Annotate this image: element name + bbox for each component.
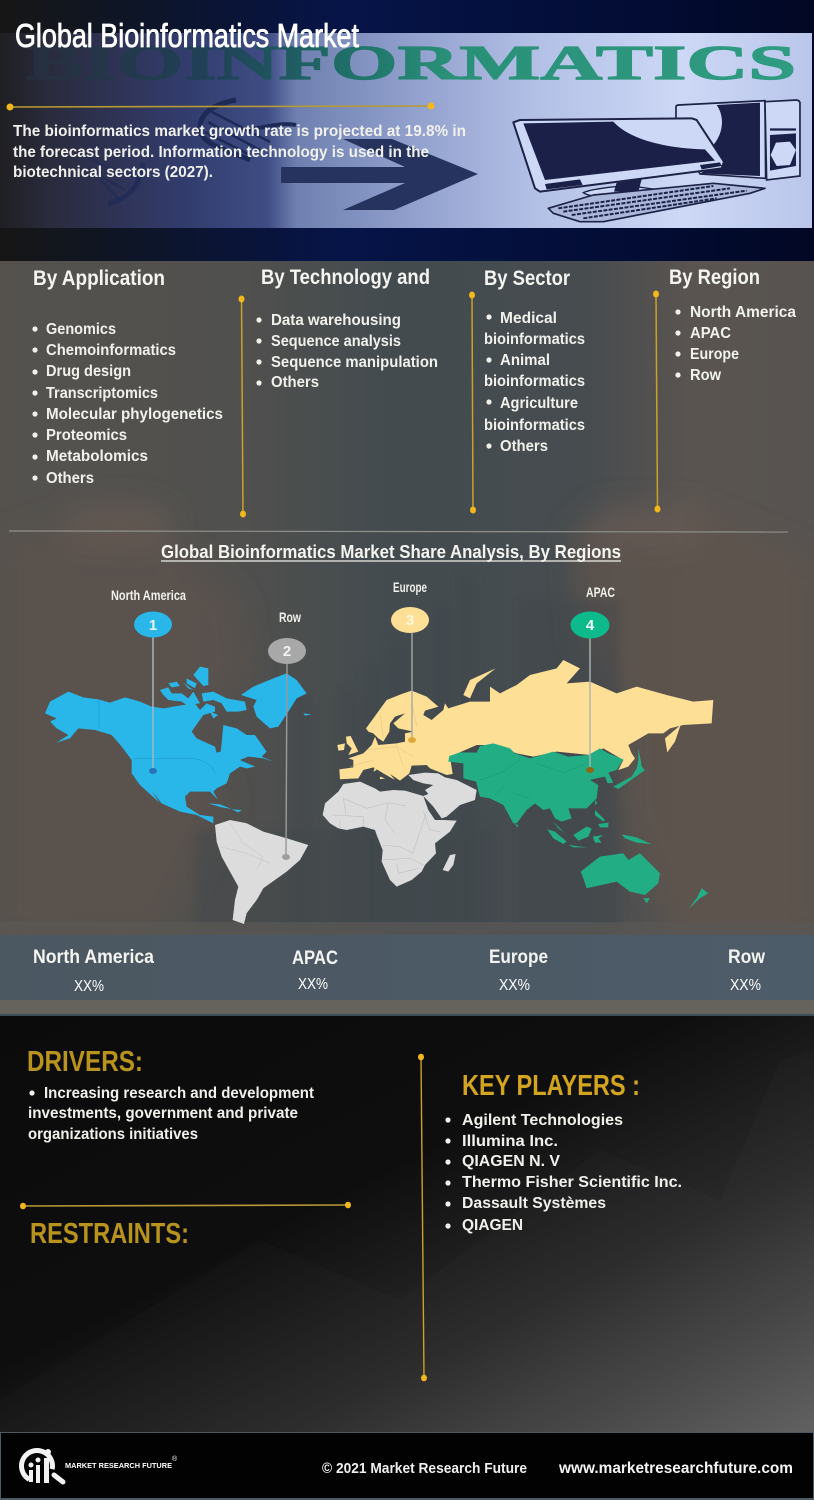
- map pin 2: row: 2: [283, 643, 291, 660]
- copyright: © 2021 Market Research Future: [322, 1460, 527, 1477]
- heading: market share analysis by regions: Global Bioinformatics Market Share Analysis, By Regions: [161, 542, 621, 562]
- icon: right arrow: [281, 139, 478, 210]
- heading: drivers: DRIVERS:: [27, 1046, 143, 1078]
- background word: bioinformatics: BIOINFORMATICS: [26, 35, 796, 90]
- divider: application and technology: [238, 296, 246, 518]
- list: sector segments: Agriculture: [500, 395, 578, 412]
- list: sector segments: Medical: [500, 310, 557, 327]
- list: technology segments: Sequence manipulation: [271, 354, 438, 371]
- drivers text: organizations initiatives: [28, 1126, 198, 1143]
- map region: latin america: [215, 820, 308, 924]
- list: application segments: Molecular phylogenetics: [46, 406, 223, 423]
- intro text block: The bioinformatics market growth rate is projected at 19.8% in: [13, 123, 466, 140]
- map pin 1: north america: North America: [111, 587, 186, 603]
- map pin 4: apac: [570, 584, 615, 773]
- list: key players: Dassault Systèmes: [462, 1195, 606, 1212]
- list: sector segments: Others: [500, 438, 548, 455]
- list: application segments: Proteomics: [46, 427, 127, 444]
- map region: europe and russia: [337, 660, 713, 781]
- divider line with gold end dots: [6, 102, 434, 110]
- heading: by region: By Region: [669, 266, 760, 289]
- icon: dna helix: [85, 100, 296, 204]
- map pin 1: north america: [111, 587, 186, 774]
- panel: by region: [669, 266, 796, 384]
- map pin 3: europe: 3: [406, 612, 414, 629]
- region share: row: [728, 947, 765, 994]
- logo: market research future: [16, 1445, 178, 1487]
- list: sector segments: bioinformatics: [484, 417, 585, 434]
- list: application segments: Chemoinformatics: [46, 342, 176, 359]
- region share: north america: North America: [33, 947, 154, 968]
- list: application segments: Genomics: [46, 321, 116, 338]
- website: www.marketresearchfuture.com: [558, 1460, 793, 1477]
- list: sector segments: [484, 310, 585, 455]
- drivers text: investments, government and private: [28, 1105, 298, 1122]
- heading: restraints: RESTRAINTS:: [30, 1218, 189, 1250]
- world map: [45, 660, 713, 924]
- region share: europe: [489, 947, 548, 994]
- list: application segments: [32, 321, 223, 487]
- intro text block: [13, 123, 466, 181]
- map pin 1: north america: 1: [149, 617, 157, 634]
- list: key players: Illumina Inc.: [462, 1133, 558, 1150]
- region share: apac: XX%: [298, 976, 328, 993]
- map pin 2: row: [268, 609, 306, 860]
- map region: oceania: [581, 853, 708, 909]
- panel: segmentation and regional map background: [0, 261, 814, 1016]
- list: key players: [445, 1112, 682, 1234]
- list: technology segments: Others: [271, 374, 319, 391]
- divider: technology and sector: [469, 292, 476, 514]
- region share: europe: XX%: [499, 977, 530, 994]
- region share: row: Row: [728, 947, 765, 968]
- heading: by application: By Application: [33, 267, 165, 290]
- map region: asia pacific: [448, 743, 652, 847]
- drivers text: [28, 1085, 315, 1143]
- panel: footer: [0, 1432, 814, 1500]
- divider: gold line: [20, 1202, 351, 1209]
- list: region segments: Europe: [690, 346, 739, 363]
- list: region segments: [675, 304, 796, 384]
- list: technology segments: [256, 312, 438, 391]
- divider: vertical gold line: [418, 1054, 427, 1381]
- map pin 3: europe: [391, 579, 429, 743]
- list: key players: QIAGEN: [462, 1217, 523, 1234]
- region share: apac: APAC: [292, 948, 338, 969]
- map region: africa and middle east: [323, 773, 477, 887]
- panel: by sector: [484, 267, 585, 455]
- list: key players: Agilent Technologies: [462, 1112, 623, 1129]
- list: sector segments: bioinformatics: [484, 331, 585, 348]
- map region: north america: [45, 667, 312, 823]
- panel: by technology: [256, 266, 438, 391]
- logo: market research future: MARKET RESEARCH FUTURE: [65, 1461, 172, 1470]
- map pin 3: europe: Europe: [393, 579, 427, 595]
- list: key players: QIAGEN N. V: [462, 1153, 560, 1170]
- logo: market research future: ®: [172, 1455, 178, 1463]
- list: region segments: North America: [690, 304, 796, 321]
- panel: drivers, restraints and key players: [0, 1014, 814, 1432]
- list: application segments: Others: [46, 470, 94, 487]
- heading: key players: KEY PLAYERS :: [462, 1070, 640, 1102]
- map pin 2: row: Row: [279, 609, 301, 625]
- icon: desktop computer: [513, 100, 800, 222]
- map pin 4: apac: 4: [586, 617, 595, 634]
- title: Global Bioinformatics Market: [15, 17, 359, 54]
- region share: north america: XX%: [74, 978, 104, 995]
- list: region segments: Row: [690, 367, 722, 384]
- intro text block: biotechnical sectors (2027).: [13, 164, 213, 181]
- panel: header banner: [0, 0, 814, 262]
- list: application segments: Transcriptomics: [46, 385, 158, 402]
- list: key players: Thermo Fisher Scientific Inc.: [462, 1174, 682, 1191]
- panel: regional share band: [0, 935, 814, 1000]
- drivers text: Increasing research and development: [44, 1085, 315, 1102]
- heading: by sector: By Sector: [484, 267, 570, 290]
- list: region segments: APAC: [690, 325, 731, 342]
- list: application segments: Metabolomics: [46, 448, 148, 465]
- region share: north america: [33, 947, 154, 995]
- list: sector segments: Animal: [500, 352, 550, 369]
- list: sector segments: bioinformatics: [484, 373, 585, 390]
- intro text block: the forecast period. Information technology is used in the: [13, 144, 429, 161]
- divider: sector and region: [653, 290, 660, 512]
- heading: by technology and: By Technology and: [261, 266, 430, 289]
- region share: row: XX%: [730, 977, 761, 994]
- map pin 4: apac: APAC: [586, 584, 615, 600]
- list: application segments: Drug design: [46, 363, 131, 380]
- list: technology segments: Sequence analysis: [271, 333, 401, 350]
- region share: apac: [292, 948, 338, 993]
- panel: by application: [32, 267, 223, 487]
- list: technology segments: Data warehousing: [271, 312, 401, 329]
- region share: europe: Europe: [489, 947, 548, 968]
